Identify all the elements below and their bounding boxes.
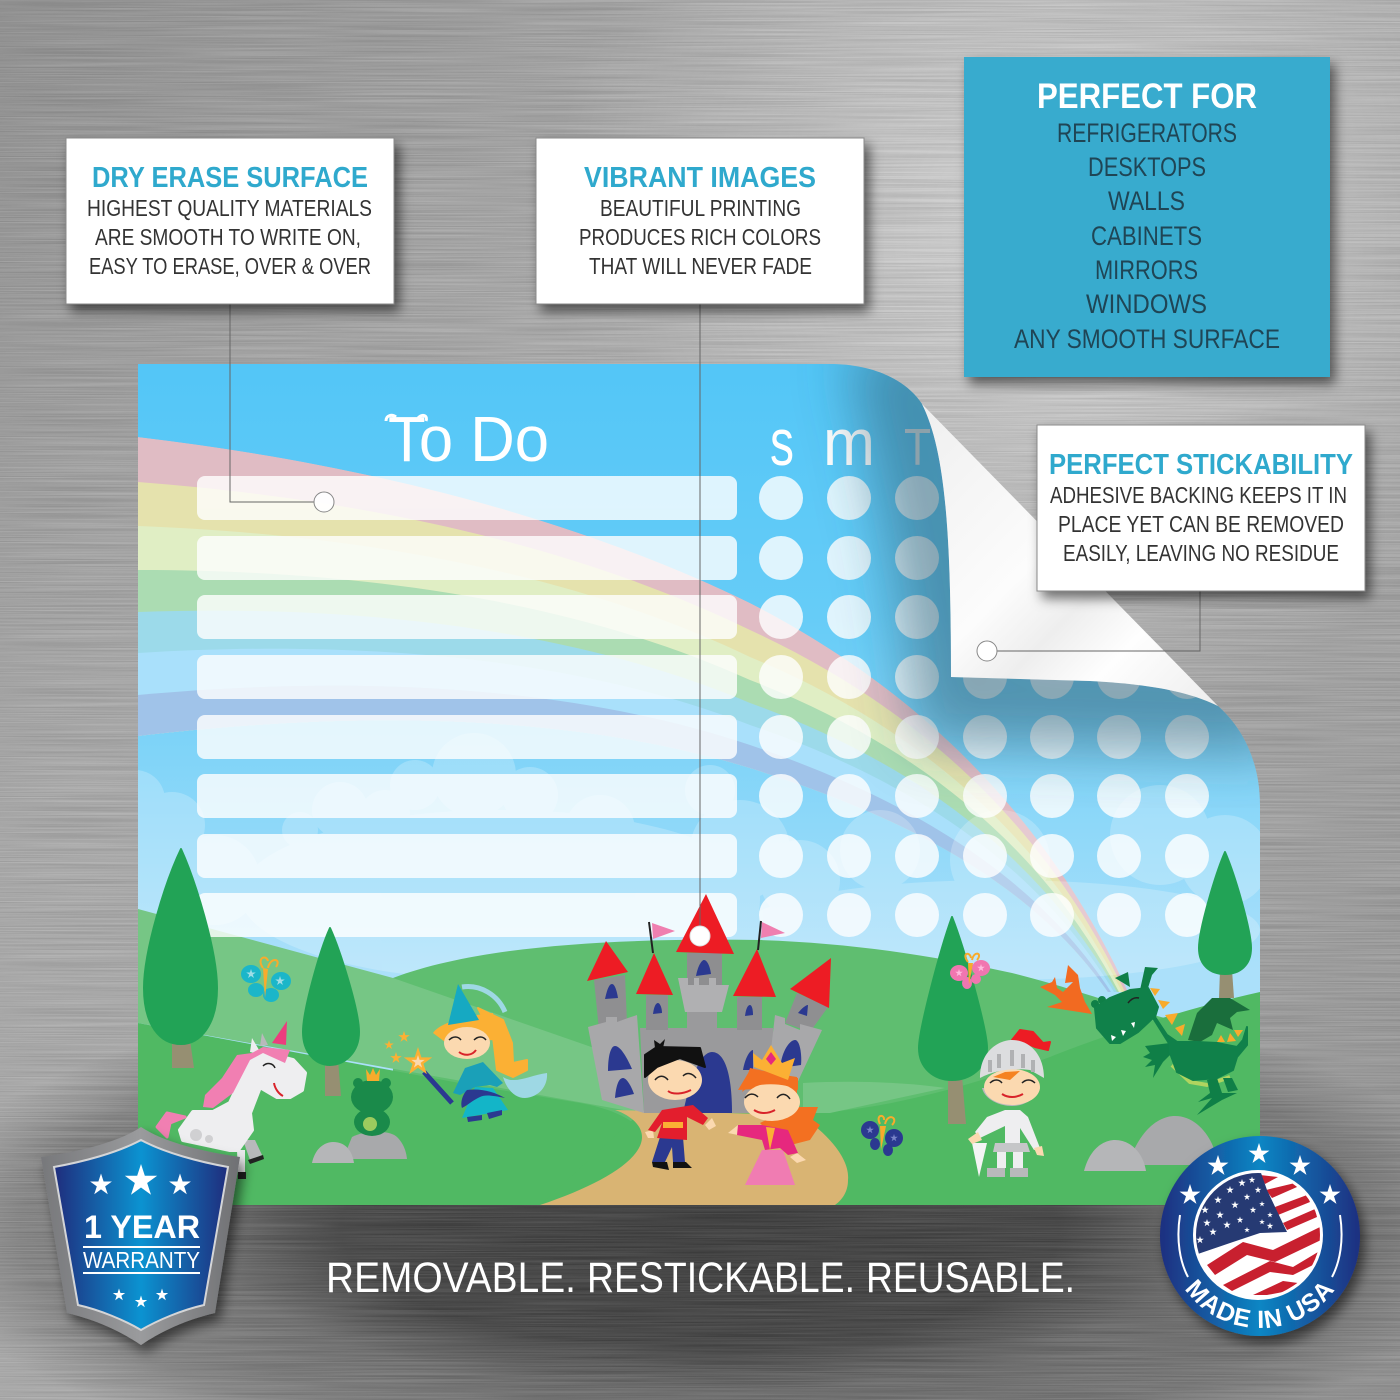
panel: vibrant images: [536, 138, 864, 304]
callout: vibrant images connector: [690, 304, 710, 946]
castle roofs: [587, 894, 831, 1008]
hills: [138, 909, 1260, 1205]
panel: vibrant images: THAT WILL NEVER FADE: [589, 253, 812, 279]
character: fairy: [384, 984, 547, 1122]
panel: perfect stickability: EASILY, LEAVING NO RESIDUE: [1063, 540, 1339, 566]
panel: vibrant images: VIBRANT IMAGES: [584, 162, 816, 194]
tree: [919, 917, 987, 1124]
day letters: [771, 429, 930, 466]
badge: made in USA: [1159, 1135, 1372, 1350]
tree: [303, 928, 359, 1096]
butterfly: teal: [241, 957, 291, 1002]
character: princess: [728, 1045, 820, 1185]
flag: [1196, 1173, 1320, 1295]
panel: perfect for: PERFECT FOR: [1037, 77, 1257, 116]
panel: perfect for: DESKTOPS: [1088, 152, 1206, 182]
day circles: [759, 476, 1209, 937]
castle: [587, 894, 831, 1113]
panel: dry erase surface: [66, 138, 394, 304]
rocks: [312, 1116, 1218, 1171]
panel: perfect stickability: PLACE YET CAN BE REMOVED: [1058, 511, 1344, 537]
badge: made in USA: MADE IN USA: [1185, 1278, 1335, 1328]
tree: [144, 849, 217, 1068]
butterfly: pink: [950, 954, 990, 989]
to-do rows: [197, 476, 737, 937]
panel: perfect for: MIRRORS: [1095, 255, 1198, 285]
day letters: T: [904, 419, 931, 477]
day letters: s: [770, 405, 794, 479]
callout: dry erase connector: [230, 304, 334, 512]
panel: perfect for: REFRIGERATORS: [1057, 118, 1237, 148]
heading: To Do: To Do: [388, 403, 549, 475]
panel: vibrant images: BEAUTIFUL PRINTING: [600, 195, 801, 221]
butterfly: navy: [861, 1116, 903, 1156]
panel: dry erase surface: HIGHEST QUALITY MATERIALS: [87, 195, 372, 221]
shading: curl shadow: [900, 340, 1280, 700]
character: frog: [351, 1068, 393, 1136]
panel: dry erase surface: EASY TO ERASE, OVER & OVER: [89, 253, 371, 279]
tree: [1199, 852, 1251, 998]
tagline: REUSABLE.: [866, 1254, 1075, 1302]
panel: perfect for: WALLS: [1108, 186, 1185, 216]
flap: peeled corner: [922, 404, 1218, 706]
badge: 1 year warranty: [41, 1127, 240, 1345]
heading: To Do: [384, 414, 546, 462]
panel: perfect stickability: [1037, 425, 1365, 591]
character: knight: [968, 1030, 1050, 1177]
callout: stickability connector: [977, 591, 1200, 661]
panel: perfect for: CABINETS: [1091, 221, 1202, 251]
tagline: [326, 1254, 1075, 1302]
tagline: REMOVABLE.: [326, 1254, 576, 1302]
panel: perfect for: ANY SMOOTH SURFACE: [1014, 324, 1280, 354]
panel: perfect for: WINDOWS: [1086, 289, 1207, 319]
panel: dry erase surface: ARE SMOOTH TO WRITE ON,: [95, 224, 361, 250]
rainbow: [138, 437, 1127, 992]
panel: perfect stickability: PERFECT STICKABILITY: [1049, 449, 1353, 481]
character: dragon: [1040, 965, 1250, 1115]
character: unicorn: [157, 1021, 305, 1179]
panel: perfect for: [964, 57, 1330, 377]
dirt path: [540, 1110, 848, 1205]
panel: dry erase surface: DRY ERASE SURFACE: [92, 162, 368, 194]
character: prince: [645, 1039, 716, 1170]
tagline: RESTICKABLE.: [587, 1254, 855, 1302]
castle flags: [649, 921, 785, 953]
badge: 1 year warranty: 1 YEAR: [84, 1209, 200, 1245]
sky: [138, 364, 1260, 1071]
badge: 1 year warranty: WARRANTY: [83, 1247, 200, 1273]
day letters: m: [823, 405, 875, 479]
clouds: [138, 759, 1260, 980]
panel: vibrant images: PRODUCES RICH COLORS: [579, 224, 821, 250]
panel: chart sheet: [83, 340, 1280, 1210]
